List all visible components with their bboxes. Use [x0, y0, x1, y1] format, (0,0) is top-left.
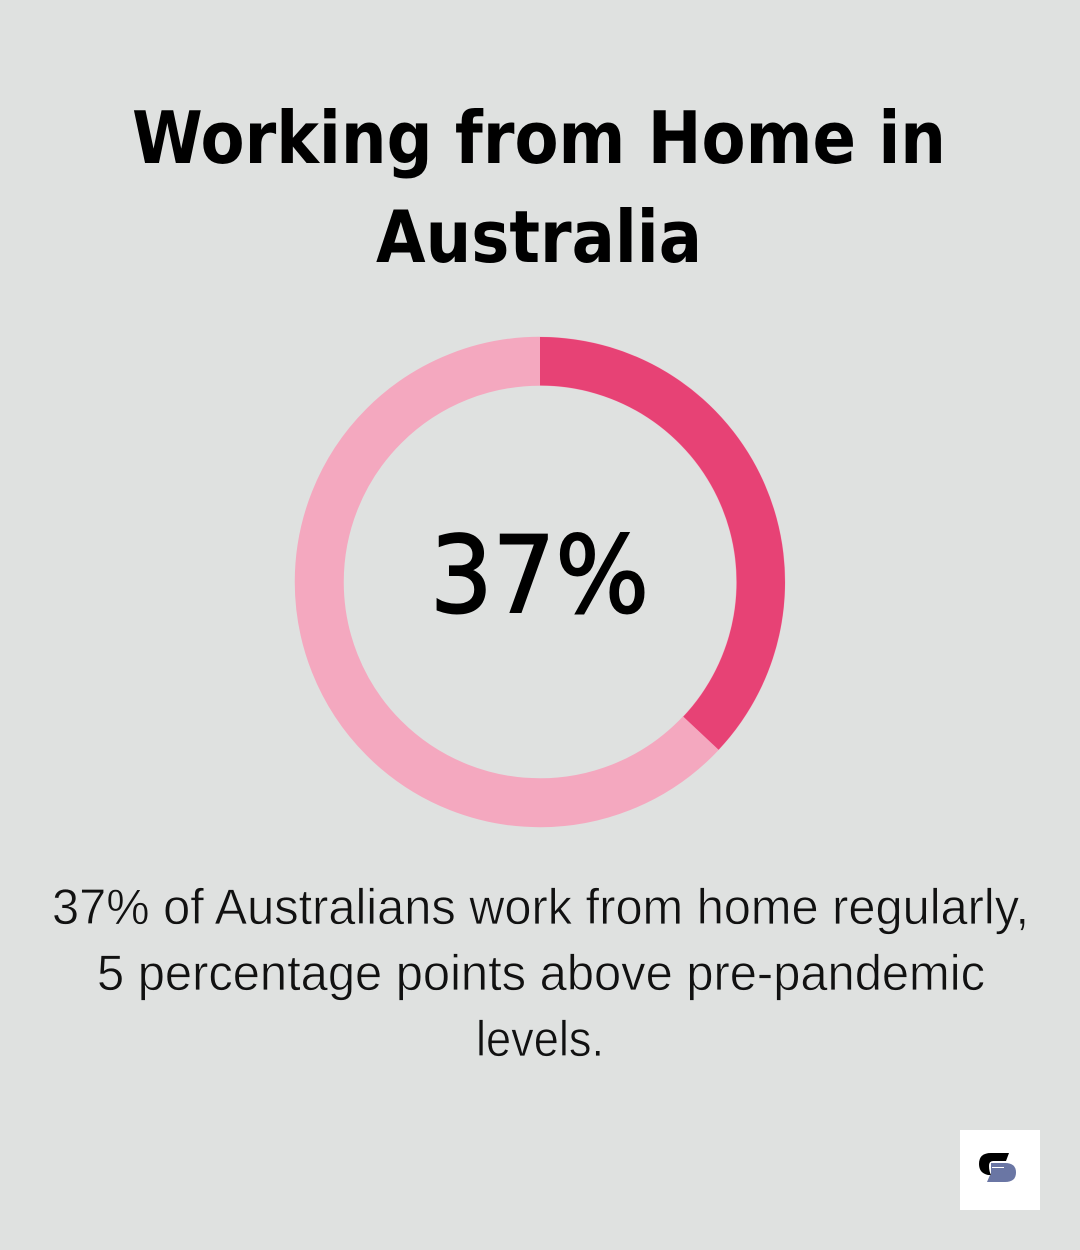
donut chart: 37% [319, 337, 785, 803]
logo background [960, 1130, 1040, 1210]
description text: levels. [476, 1011, 604, 1067]
description text: 37% of Australians work from home regularly, [52, 879, 1029, 935]
description text: 5 percentage points above pre-pandemic [97, 945, 985, 1001]
donut value segment [540, 337, 785, 750]
logo mark blue stroke [987, 1163, 1016, 1182]
logo mark inner highlight [992, 1167, 1004, 1168]
title [132, 96, 946, 279]
title: Australia [376, 195, 702, 279]
description text [52, 879, 1029, 1067]
title: Working from Home in [132, 96, 946, 180]
donut track [319, 361, 761, 803]
logo mark black stroke [979, 1153, 1009, 1175]
logo badge [960, 1130, 1040, 1210]
centre value: 37% [430, 514, 649, 637]
